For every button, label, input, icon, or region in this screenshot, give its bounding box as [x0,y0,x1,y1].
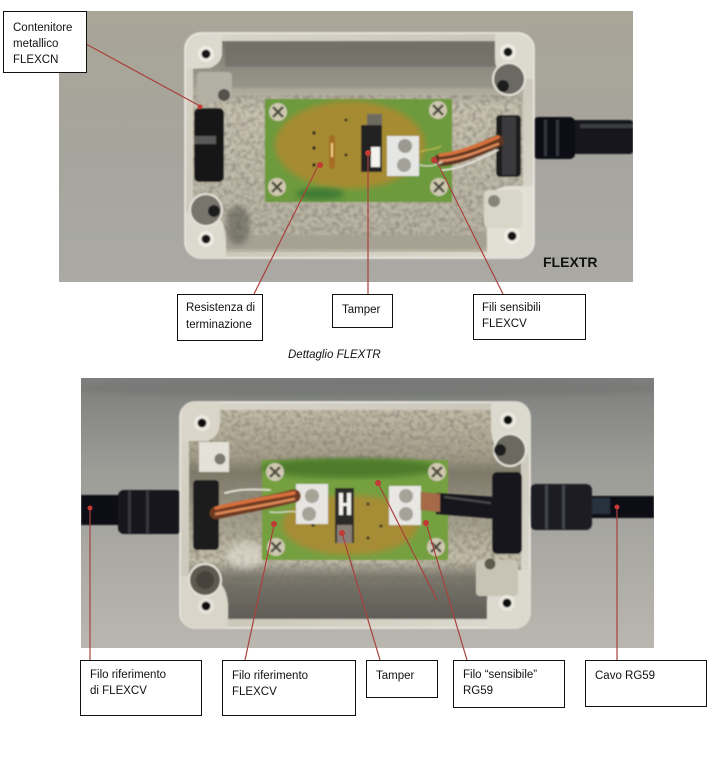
callout: Filo sensibile RG59: RG59 [463,685,493,697]
circuit board [260,458,448,560]
metal enclosure [180,402,530,628]
screw holes [198,46,214,62]
callout: Fili sensibili FLEXCV: FLEXCV [482,318,527,330]
callout: Filo riferimento di FLEXCV: di FLEXCV [90,685,147,697]
leader arrowheads [88,104,620,536]
black cable and gland, left [81,490,186,534]
callout: Tamper [332,294,392,328]
leader lines, bottom photo [90,483,617,660]
callout: Cavo RG59 [586,660,706,706]
callout: Resistenza di terminazione [178,294,262,340]
callout: Filo riferimento FLEXCV: FLEXCV [232,686,277,698]
callout: Resistenza di terminazione: Resistenza di [186,302,255,314]
tamper switch [335,488,354,543]
callout: Filo sensibile RG59: Filo “sensibile” [463,669,537,681]
callout: Filo riferimento di FLEXCV [80,660,202,716]
callout: Filo sensibile RG59 [454,660,564,708]
cable and gland, right [525,484,654,530]
cable gland and black cable, right [530,117,633,159]
rubber grommets [194,108,224,182]
callout: Tamper bottom [366,660,438,698]
callout: Contenitore metallico FLEXCN: metallico [13,38,58,50]
wires [420,137,498,170]
callout: Filo riferimento di FLEXCV: Filo riferimento [90,669,166,681]
metal enclosure [185,33,534,258]
callout: Filo riferimento FLEXCV: Filo riferimento [232,670,308,682]
callout: Contenitore metallico FLEXCN: FLEXCN [13,54,58,66]
callout: Fili sensibili FLEXCV [474,294,586,340]
callout: Fili sensibili FLEXCV: Fili sensibili [482,302,541,314]
callout: Contenitore metallico FLEXCN [4,12,86,72]
photo: FLEXTR junction box [59,11,633,282]
rubber grommets [193,480,219,550]
wires and coaxial cable [216,489,497,519]
circuit board [265,99,452,202]
callout: Filo riferimento FLEXCV [222,660,356,716]
callout: Cavo RG59: Cavo RG59 [595,670,655,682]
tamper switch [366,113,383,126]
callout: Tamper bottom: Tamper [376,670,415,682]
caption: Dettaglio FLEXTR: Dettaglio FLEXTR [288,349,381,361]
callout: Contenitore metallico FLEXCN: Contenitore [13,22,72,34]
terminal blocks [296,484,328,524]
photo: FLEXCV and RG59 junction box [68,378,668,648]
terminal block [387,136,419,176]
callout: Tamper: Tamper [342,304,381,316]
leader lines, top photo [86,44,503,294]
callout: Resistenza di terminazione: terminazione [186,319,252,331]
label: FLEXTR: FLEXTR [543,254,597,270]
corner posts [192,40,223,70]
